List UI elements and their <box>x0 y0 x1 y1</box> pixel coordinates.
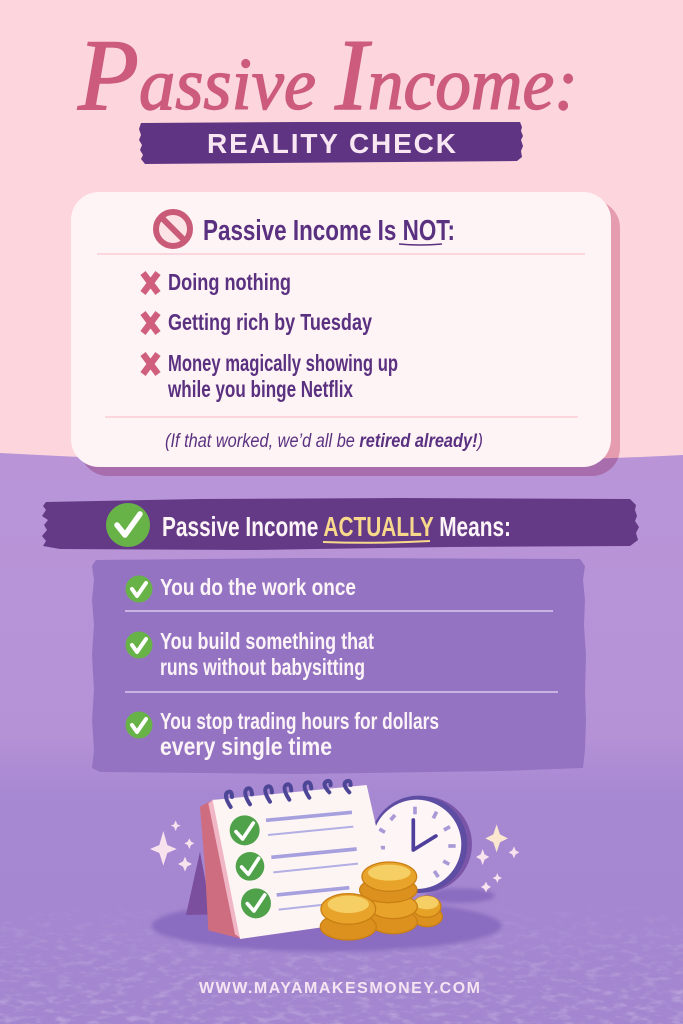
banner: passive income actually means <box>42 498 639 550</box>
heading: actually means: Passive Income ACTUALLY Means: <box>162 511 511 542</box>
background: purple lower area <box>0 453 683 1024</box>
card body <box>71 192 611 467</box>
coin stacks <box>320 862 442 940</box>
icon: prohibited sign <box>156 212 190 246</box>
list item: getting rich by tuesday: Getting rich by Tuesday <box>168 309 372 335</box>
ground shadow <box>152 900 502 952</box>
list item: money magically showing up: while you binge Netflix <box>167 376 353 402</box>
list item: do the work once <box>126 574 356 602</box>
front stack <box>320 913 376 940</box>
calendar page <box>213 785 397 939</box>
illustration: calendar, clock and coins <box>150 781 519 952</box>
footer: website url: WWW.MAYAMAKESMONEY.COM <box>199 980 480 997</box>
list item: stop trading hours: every single time <box>160 733 332 761</box>
subtitle banner: reality check <box>139 122 523 164</box>
calendar back stand <box>186 852 212 915</box>
icon: clock <box>370 796 472 893</box>
small back stack <box>412 907 442 927</box>
heading: passive income is not: Passive Income Is NOT: <box>203 215 455 247</box>
card shadow <box>80 200 620 476</box>
icon: sparkles right <box>476 824 519 892</box>
checklist row 1 <box>230 812 353 845</box>
checklist row 2 <box>236 849 358 881</box>
list item: build something <box>126 628 374 680</box>
title: Passive <box>77 19 316 132</box>
background: speckled texture at the bottom <box>0 930 683 1024</box>
title: Income: <box>334 19 578 132</box>
title <box>77 19 578 132</box>
panel: what passive income means <box>92 558 586 774</box>
list item: do the work once: You do the work once <box>160 574 356 600</box>
list item: money magically showing up: Money magically showing up <box>168 350 398 376</box>
list item: build something: runs without babysitting <box>160 654 365 680</box>
list item: build something: You build something that <box>160 628 374 654</box>
checklist row 3 <box>241 888 349 918</box>
list item: money magically showing up <box>143 350 398 402</box>
list item: doing nothing: Doing nothing <box>168 269 291 295</box>
icon: sparkles left <box>150 820 194 872</box>
icon: green check <box>106 503 150 547</box>
calendar rings <box>226 781 351 807</box>
tall stack <box>369 910 417 934</box>
list item: stop trading hours <box>126 708 439 761</box>
list item: stop trading hours: You stop trading hours for dollars <box>160 708 439 734</box>
note: if that worked: (If that worked, we’d all be retired already!) <box>165 431 483 452</box>
subtitle banner: reality check: REALITY CHECK <box>207 128 456 159</box>
list item: doing nothing <box>143 269 291 295</box>
panel: passive income is not <box>71 192 620 476</box>
